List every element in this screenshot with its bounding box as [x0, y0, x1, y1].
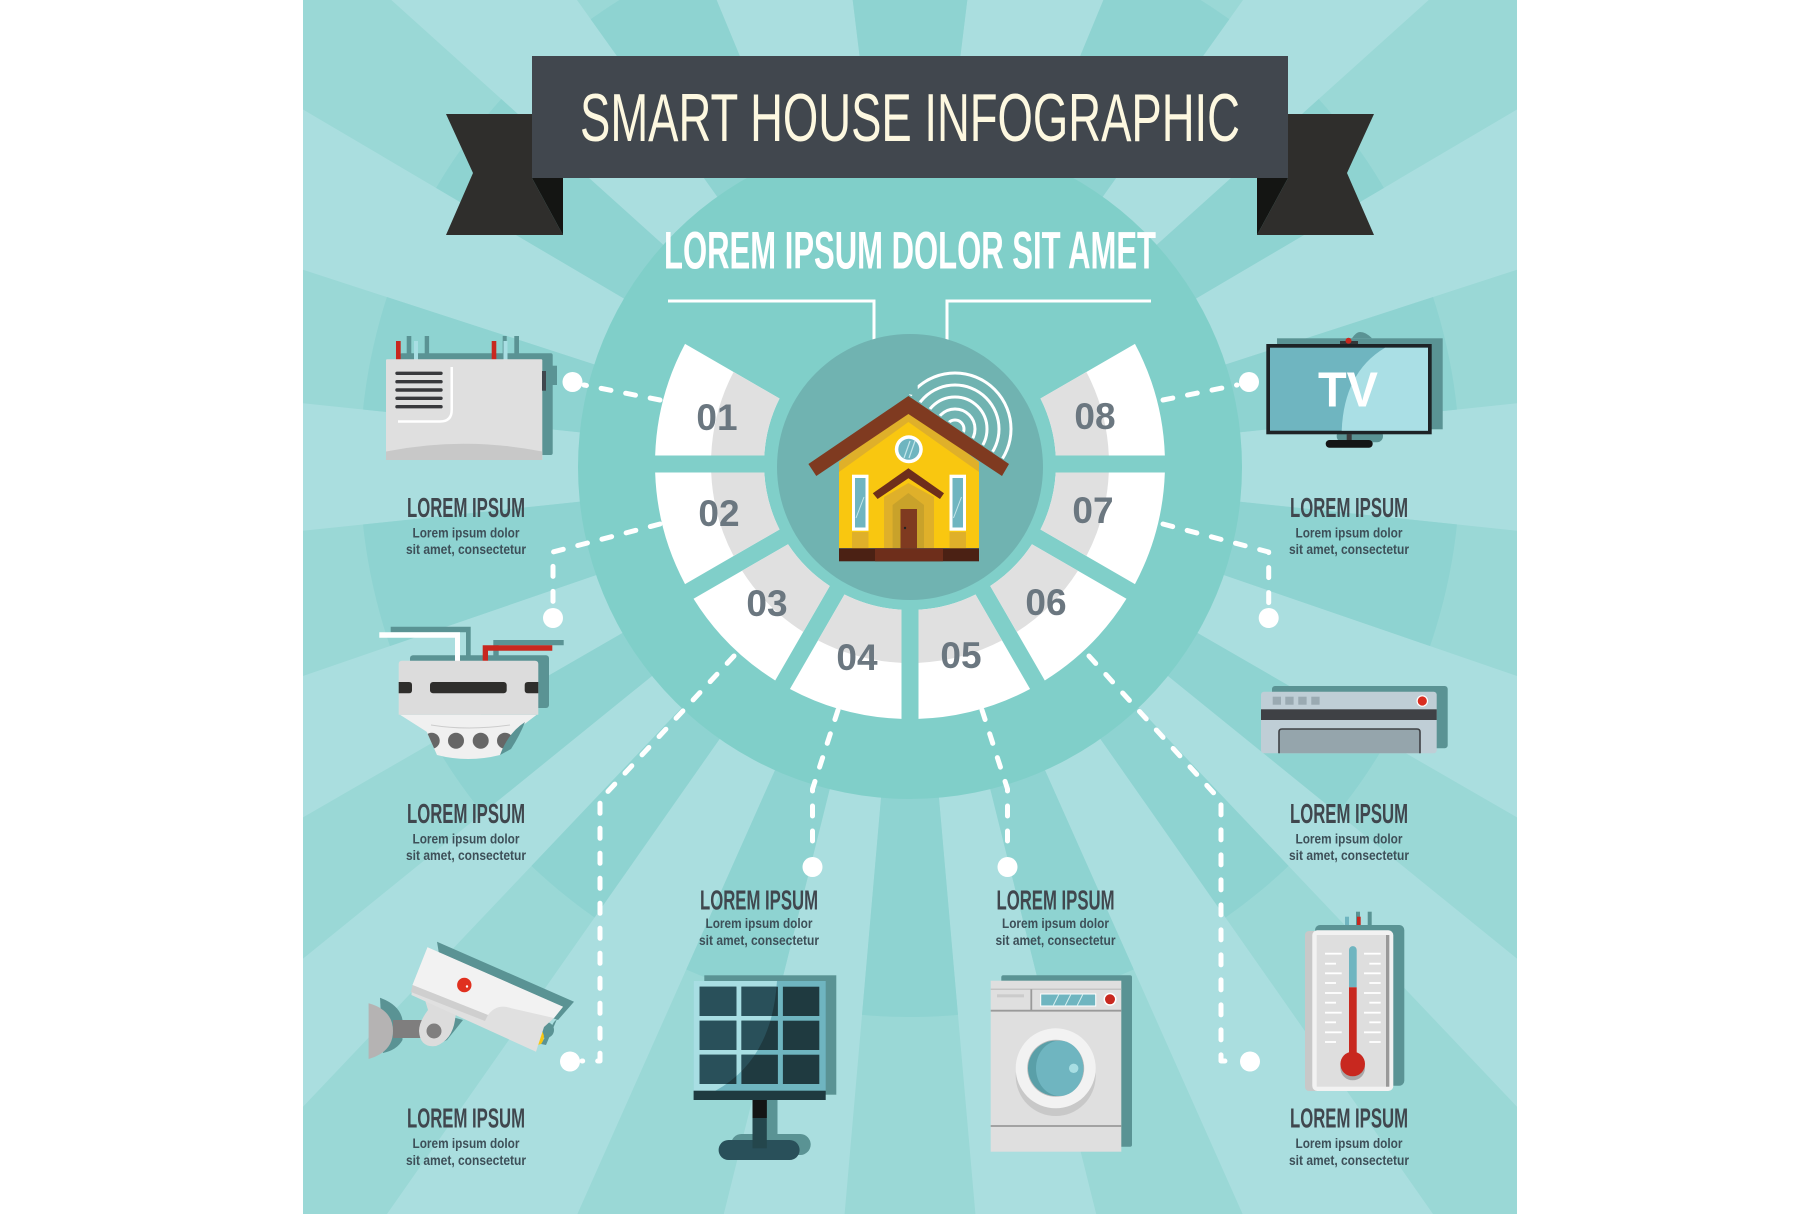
segment 03 [689, 524, 850, 685]
label: solar panel [699, 884, 820, 948]
segment numbers: 07 [1072, 490, 1114, 531]
segment numbers: 08 [1074, 396, 1116, 437]
segment numbers [696, 396, 1116, 678]
label: air conditioner: LOREM IPSUM [1290, 798, 1408, 829]
icon: washing machine [991, 975, 1132, 1152]
label: router [406, 492, 527, 557]
segment 04 [788, 587, 929, 725]
icon: yellow house [808, 396, 1009, 561]
segment 05 [891, 587, 1032, 725]
connector 02 [543, 524, 660, 628]
label: solar panel: Lorem ipsum dolor [706, 916, 813, 931]
segment 06 [970, 524, 1131, 685]
label: router: sit amet, consectetur [406, 542, 527, 557]
segment numbers: 03 [746, 583, 788, 624]
title ribbon [446, 56, 1374, 235]
subtitle: LOREM IPSUM DOLOR SIT AMET [664, 222, 1156, 280]
segment numbers: 06 [1025, 582, 1067, 623]
label: security camera [406, 1102, 527, 1168]
label: TV: Lorem ipsum dolor [1296, 525, 1403, 540]
label: security camera: Lorem ipsum dolor [412, 1136, 520, 1151]
connector 04 [802, 710, 838, 877]
label: TV: LOREM IPSUM [1290, 492, 1408, 523]
label: washing machine: LOREM IPSUM [996, 884, 1114, 915]
title: SMART HOUSE INFOGRAPHIC [580, 80, 1240, 156]
icon: smoke detector [379, 627, 564, 759]
segment numbers: 02 [698, 493, 740, 534]
label: router: LOREM IPSUM [407, 492, 525, 523]
segment numbers: 05 [940, 635, 982, 676]
connector 05 [982, 710, 1018, 877]
background: sunburst panel [303, 0, 1517, 1214]
segment 02 [649, 445, 787, 586]
label: air conditioner: Lorem ipsum dolor [1296, 831, 1403, 846]
bracket lines under subtitle [668, 301, 1151, 345]
label: smoke detector: sit amet, consectetur [406, 848, 527, 863]
connector 03 [560, 656, 734, 1072]
connector 08 [1163, 372, 1259, 400]
segment numbers: 04 [836, 637, 878, 678]
icon: solar panel [694, 975, 836, 1160]
connector 07 [1163, 524, 1279, 628]
central teal disc [578, 135, 1242, 799]
label: washing machine: sit amet, consectetur [996, 933, 1116, 948]
connector 01 [562, 372, 660, 400]
label: smoke detector: LOREM IPSUM [407, 798, 525, 829]
icon: wifi signal [909, 372, 1012, 460]
segment 08 [1033, 342, 1171, 483]
icon: thermometer [1305, 912, 1404, 1091]
label: thermometer [1289, 1102, 1410, 1168]
label: smoke detector: Lorem ipsum dolor [412, 831, 520, 846]
icon: air conditioner [1261, 686, 1448, 753]
label: air conditioner: sit amet, consectetur [1289, 848, 1410, 863]
label: TV: sit amet, consectetur [1289, 542, 1410, 557]
label: air conditioner [1289, 798, 1410, 863]
icon: TV [1266, 332, 1443, 448]
label: TV [1289, 492, 1410, 557]
label: washing machine: Lorem ipsum dolor [1002, 916, 1110, 931]
icon: security camera [369, 942, 574, 1059]
icon: router [386, 336, 557, 460]
connector 06 [1089, 656, 1260, 1072]
central dark disc [777, 334, 1043, 600]
label: solar panel: sit amet, consectetur [699, 933, 820, 948]
label: solar panel: LOREM IPSUM [700, 884, 818, 915]
segment 07 [1033, 445, 1171, 586]
label: security camera: LOREM IPSUM [407, 1102, 525, 1134]
icon: TV: TV [1318, 364, 1378, 418]
label: thermometer: Lorem ipsum dolor [1296, 1136, 1403, 1151]
segment 01 [649, 342, 787, 483]
label: thermometer: LOREM IPSUM [1290, 1102, 1408, 1134]
label: security camera: sit amet, consectetur [406, 1153, 527, 1168]
label: router: Lorem ipsum dolor [412, 525, 520, 540]
label: washing machine [996, 884, 1116, 948]
label: thermometer: sit amet, consectetur [1289, 1153, 1410, 1168]
segment numbers: 01 [696, 397, 738, 438]
label: smoke detector [406, 798, 527, 863]
